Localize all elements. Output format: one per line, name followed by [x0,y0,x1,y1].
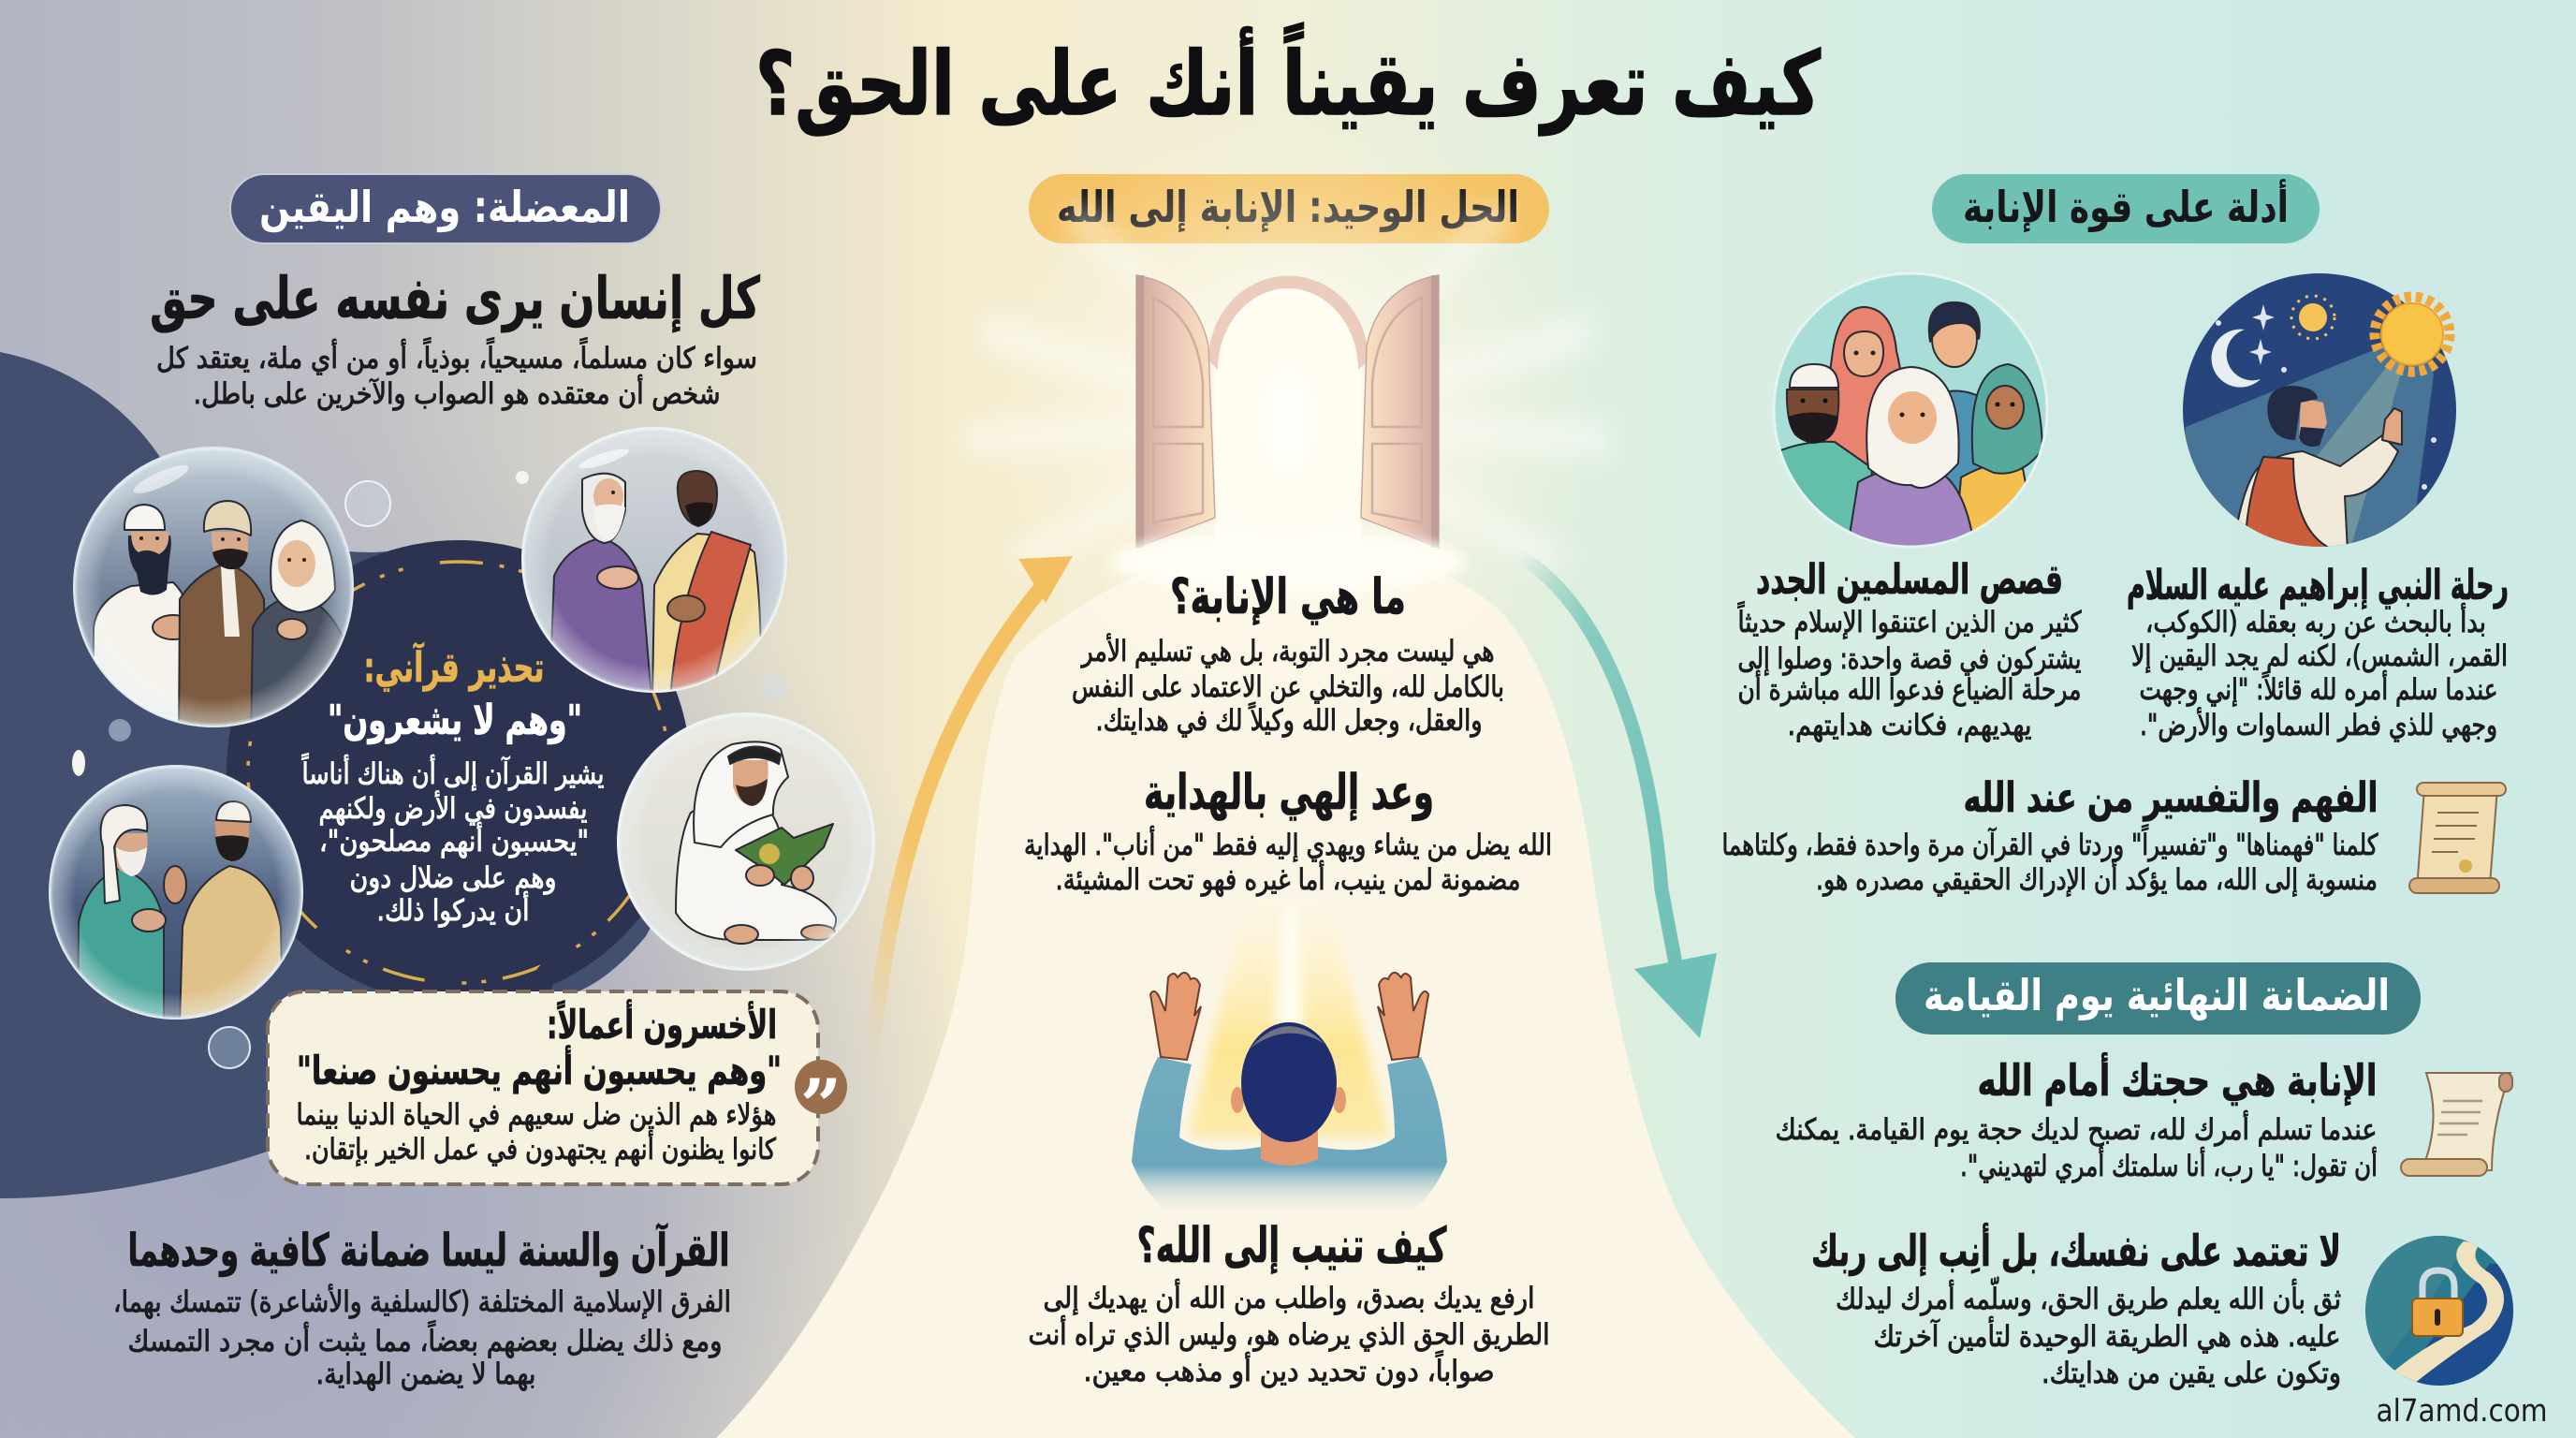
bubble: two men talking [50,766,302,1025]
text block: what is inabah: والعقل، وجعل الله وكيلاً لك في هدايتك. [1095,701,1483,738]
warning text [301,641,605,928]
panel: right column – evidence [1722,174,2548,1429]
section pill: evidence [1932,174,2320,243]
text block: what is inabah: هي ليست مجرد التوبة، بل هي تسليم الأمر [1080,633,1494,668]
text block: prophet ibrahim [2127,562,2509,742]
icon: padlock on road [2365,1236,2513,1390]
text block: do not rely on yourself: لا تعتمد على نفسك، بل أنِب إلى ربك [1811,1223,2341,1277]
heading and intro text: سواء كان مسلماً، مسيحياً، بوذياً، أو من أي ملة، يعتقد كل [156,337,757,375]
text block: quran and sunnah: القرآن والسنة ليسا ضمانة كافية وحدهما [127,1223,730,1277]
heading and intro text: شخص أن معتقده هو الصواب والآخرين على باطل. [193,374,721,411]
text block: quran and sunnah: الفرق الإسلامية المختلفة (كالسلفية والأشاعرة) تتمسك بهما، [113,1284,731,1319]
figure: woman right teal hijab [1954,364,2042,552]
text block: understanding: منسوبة إلى الله، مما يؤكد أن الإدراك الحقيقي مصدره هو. [1816,860,2378,897]
bubble: elder and monk [522,428,786,697]
figure: man in brown robe [179,501,266,740]
text block: understanding [1722,774,2378,897]
warning text: وهم على ضلال دون [350,861,556,895]
section pill: dilemma [230,174,661,243]
small bubbles [72,471,786,1068]
heading and intro text [150,264,761,411]
bubble: man reading quran [618,713,874,970]
text block: how to turn to god [1028,1218,1550,1388]
figure: woman center white hijab [1847,367,1975,552]
warning text: يفسدون في الأرض ولكنهم [318,790,588,826]
icon: paper scroll [2401,1073,2512,1176]
text block: new muslims [1737,556,2082,742]
text block: quran and sunnah: بهما لا يضمن الهداية. [316,1357,535,1391]
figure: man top right [1928,302,1986,552]
text block: how to turn to god: ارفع يديك بصدق، واطلب من الله أن يهديك إلى [1043,1279,1535,1315]
callout: greatest losers: كانوا يظنون أنهم يجتهدون في عمل الخير بإتقان. [304,1130,776,1167]
text block: do not rely on yourself: ثق بأن الله يعلم طريق الحق، وسلّمه أمرك ليدلك [1836,1276,2341,1316]
section pill: final guarantee [1895,962,2421,1034]
callout: greatest losers: الأخسرون أعمالاً: [547,999,777,1049]
gold dashed ring [248,562,669,983]
text block: prophet ibrahim: عندما سلم أمره لله قائلاً: "إني وجهت [2140,670,2497,707]
text block: divine promise: مضمونة لمن ينيب، أما غيره فهو تحت المشيئة. [1056,860,1520,897]
text block: your proof: الإنابة هي حجتك أمام الله [1977,1052,2378,1106]
text block: new muslims: مرحلة الضياع فدعوا الله مباشرة أن [1737,670,2082,707]
text block: how to turn to god: الطريق الحق الذي يرضاه هو، وليس الذي تراه أنت [1028,1315,1550,1352]
illustration: prophet ibrahim under sky [2181,273,2456,552]
arrow: yellow up [871,556,1073,1058]
arrow: teal down [1518,556,1717,1038]
text block: do not rely on yourself [1811,1223,2341,1390]
section pill: solution [1029,174,1549,243]
warning text: تحذير قرآني: [363,641,545,692]
callout: greatest losers [268,950,847,1184]
figure: seated man [676,741,836,944]
text block: understanding: الفهم والتفسير من عند الله [1964,774,2378,822]
text block: what is inabah: ما هي الإنابة؟ [1170,569,1406,625]
text block: how to turn to god: صواباً، دون تحديد دين أو مذهب معين. [1084,1350,1494,1388]
text block: do not rely on yourself: وتكون على يقين من هدايتك. [2042,1357,2341,1390]
text block: your proof [1775,1052,2378,1183]
section pill: final guarantee: الضمانة النهائية يوم القيامة [1924,970,2390,1020]
central bell panel [716,538,1855,1438]
figure: man with cap [1774,364,1872,552]
warning text: يشير القرآن إلى أن هناك أناساً [301,753,605,791]
text block: new muslims: قصص المسلمين الجدد [1756,556,2063,604]
illustration: man praying with light rays [1132,903,1447,1217]
illustration: new muslims group [1774,273,2047,552]
text block: quran and sunnah [113,1223,731,1391]
figure: man in white robe [92,504,183,721]
website credit: al7amd.com [2376,1392,2548,1429]
text block: how to turn to god: كيف تنيب إلى الله؟ [1136,1218,1447,1274]
text block: divine promise: وعد إلهي بالهداية [1144,765,1434,821]
callout: greatest losers: "وهم يحسبون أنهم يحسنون صنعا" [297,1045,782,1094]
warning text: "وهم لا يشعرون" [328,697,582,744]
figure: woman pink hijab [1821,307,1904,487]
text block: new muslims: يهديهم، فكانت هدايتهم. [1788,709,2031,742]
icon: scroll with seal [2409,783,2506,893]
text block: new muslims: يشتركون في قصة واحدة: وصلوا إلى [1737,642,2082,676]
bubble: three muslims [74,448,353,740]
text block: your proof: أن تقول: "يا رب، أنا سلمتك أمري لتهديني". [1960,1147,2378,1183]
section pill: evidence: أدلة على قوة الإنابة [1963,179,2289,232]
panel: left column – the problem [0,174,874,1391]
section pill: solution: الحل الوحيد: الإنابة إلى الله [1057,182,1519,233]
figure: monk in cream and red [652,471,761,697]
figure: elder in purple [549,474,651,697]
text block: prophet ibrahim: بدأ بالبحث عن ربه بعقله (الكوكب، [2145,603,2486,639]
panel: center column – the solution [871,112,1717,1388]
illustration: open door with light [964,112,1610,730]
text block: divine promise [1024,765,1552,897]
text block: what is inabah: بالكامل لله، والتخلي عن الاعتماد على النفس [1072,670,1504,704]
text block: do not rely on yourself: عليه. هذه هي الطريقة الوحيدة لتأمين آخرتك [1874,1316,2340,1354]
figure: woman with white hijab [250,520,343,721]
warning text: أن يدركوا ذلك. [376,891,530,928]
heading and intro text: كل إنسان يرى نفسه على حق [150,264,761,332]
figure: elder in teal [78,805,166,1025]
warning text: "يحسبون أنهم مصلحون"، [319,822,589,858]
callout: greatest losers: هؤلاء هم الذين ضل سعيهم في الحياة الدنيا بينما [296,1098,777,1132]
text block: understanding: كلمنا "فهمناها" و"تفسيراً" وردتا في القرآن مرة واحدة فقط، وكلتاهما [1722,824,2378,862]
text block: quran and sunnah: ومع ذلك يضلل بعضهم بعضاً، مما يثبت أن مجرد التمسك [127,1320,723,1358]
title: كيف تعرف يقيناً أنك على الحق؟ [755,22,1821,136]
text block: prophet ibrahim: وجهي للذي فطر السماوات والأرض". [2140,707,2497,742]
text block: your proof: عندما تسلم أمرك لله، تصبح لديك حجة يوم القيامة. يمكنك [1775,1110,2378,1147]
dark circle warning background [227,540,691,1005]
text block: new muslims: كثير من الذين اعتنقوا الإسلام حديثاً [1737,601,2082,639]
figure: man in cream [164,801,283,1025]
text block: divine promise: الله يضل من يشاء ويهدي إليه فقط "من أناب". الهداية [1024,826,1552,862]
icon: quote mark: ” [800,1064,842,1149]
dark blob background [0,352,681,1198]
section pill: dilemma: المعضلة: وهم اليقين [259,182,630,232]
text block: what is inabah [1072,569,1504,738]
